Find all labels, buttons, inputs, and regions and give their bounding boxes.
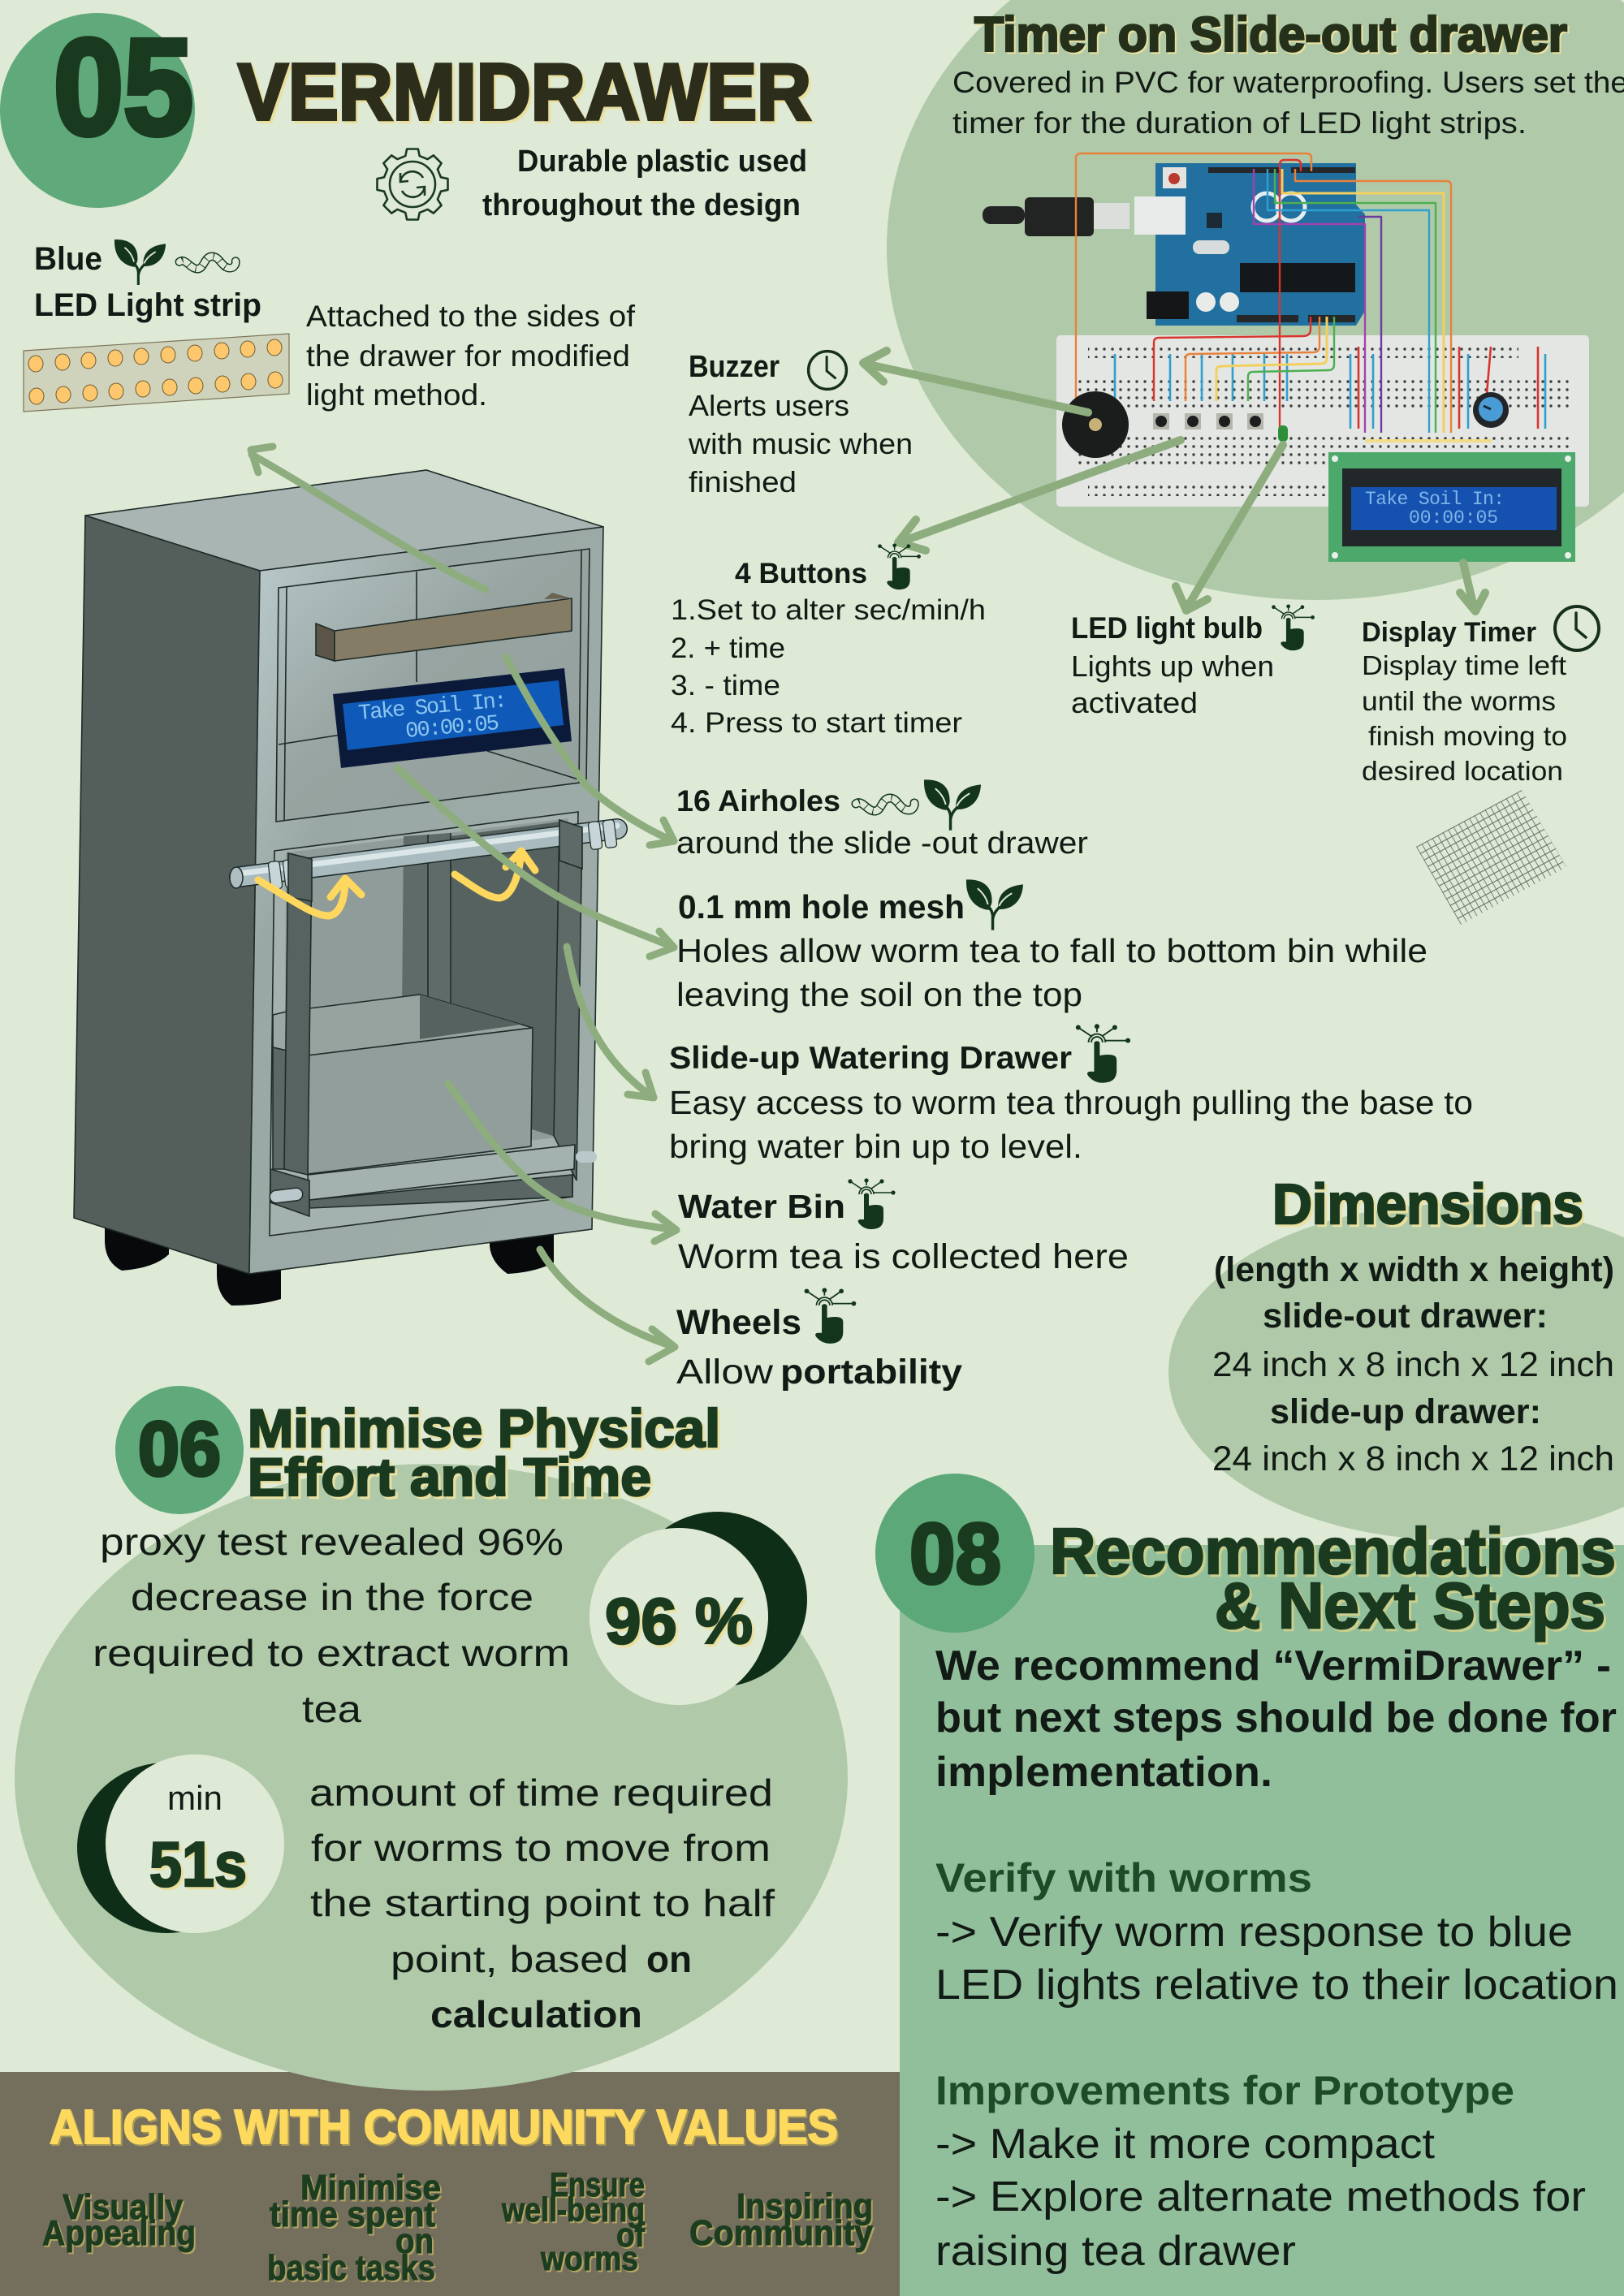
text: recommendation: We recommend “VermiDrawer” - (935, 1642, 1611, 1690)
heading: minimise physical effort and time: Effort and Time (248, 1447, 651, 1507)
value: minimise time: basic tasks (267, 2248, 435, 2288)
value: minimise time: time spent (270, 2195, 435, 2234)
icon: sprout (924, 779, 981, 831)
text: improvements for prototype (935, 2068, 1586, 2275)
title: VERMIDRAWER: VERMIDRAWER (238, 47, 811, 136)
text: buzzer: Buzzer (689, 350, 780, 384)
LED strip illustration (24, 334, 289, 412)
arrow: wheels (540, 1249, 675, 1362)
text: display timer: until the worms (1362, 686, 1556, 716)
text: time required: on (646, 1938, 692, 1980)
pull bar (230, 819, 617, 901)
heading: recommendations and next steps: & Next Steps (1215, 1569, 1605, 1642)
arrow: pull handle up yellow left (258, 878, 361, 916)
text: 4 buttons: 1.Set to alter sec/min/h (671, 594, 986, 626)
text: verify with worms: -> Verify worm response to blue (935, 1909, 1573, 1956)
panel: minimise effort ellipse (15, 1464, 848, 2091)
drawer LCD: 00:00:05 (404, 712, 500, 744)
value: inspiring community (689, 2186, 873, 2253)
text: dimensions: slide-up drawer: (1270, 1392, 1541, 1431)
text: timer description (952, 66, 1624, 140)
heading: dimensions: Dimensions (1272, 1172, 1583, 1236)
text: proxy test: required to extract worm (93, 1632, 570, 1674)
text: durable plastic: throughout the design (482, 188, 801, 222)
value: inspiring community: Community (689, 2213, 873, 2253)
icon: hand press (1076, 1024, 1130, 1083)
icon: hand press (848, 1178, 896, 1229)
arrow: buzzer (863, 351, 1088, 412)
icon: clock (1555, 606, 1599, 650)
text: dimensions: 24 inch x 8 inch x 12 inch (1212, 1345, 1614, 1384)
text: wheels: Wheels (676, 1303, 801, 1342)
text: mesh: Holes allow worm tea to fall to bottom bin while (676, 932, 1427, 969)
text: 16 airholes (676, 779, 1088, 861)
text: time required (309, 1772, 775, 2035)
illustration: vermidrawer cabinet (74, 470, 617, 1306)
value: minimise time: on (395, 2221, 434, 2261)
stat: 51 seconds: 51s (149, 1828, 247, 1900)
heading: blue LED light strip: Blue (34, 241, 102, 277)
text: LED light bulb (1071, 604, 1315, 719)
value: visually appealing (42, 2187, 196, 2253)
text: buzzer (688, 350, 913, 498)
section number 06 (115, 1386, 244, 1514)
heading: recommendations and next steps (1050, 1515, 1616, 1642)
icon: worm (179, 257, 235, 269)
Arduino board (983, 163, 1365, 326)
icon: wire mesh (1416, 790, 1566, 925)
text: 16 airholes: 16 Airholes (676, 784, 840, 818)
value: visually appealing: Appealing (42, 2213, 196, 2253)
panel: dimensions background ellipse (1168, 1204, 1624, 1540)
value: worm well-being: worms (540, 2239, 638, 2277)
text: durable plastic: Durable plastic used (517, 145, 807, 179)
text: 4 buttons: 4 Buttons (735, 558, 867, 589)
text: dimensions: 24 inch x 8 inch x 12 inch (1212, 1439, 1614, 1478)
LCD module (1328, 452, 1575, 562)
drawer LCD (333, 668, 572, 768)
icon: worm (856, 798, 914, 811)
value: worm well-being: Ensure (550, 2165, 645, 2203)
text: verify with worms: Verify with worms (935, 1855, 1312, 1901)
section number 06: 06 (138, 1406, 221, 1492)
heading: blue LED light strip: LED Light strip (34, 287, 261, 323)
text: dimensions (1212, 1250, 1614, 1478)
text: slide-up watering drawer (669, 1024, 1473, 1165)
breadboard circuit (983, 153, 1589, 562)
text: LED strip description: the drawer for modified (306, 339, 630, 373)
text: slide-up watering drawer: Easy access to worm tea through pulling the base to (669, 1084, 1473, 1121)
text: recommendation: implementation. (935, 1749, 1272, 1796)
icon: hand press (1272, 604, 1315, 650)
text: LED strip description: Attached to the sides of (306, 300, 636, 333)
potentiometer (1473, 392, 1509, 428)
stat: 96 percent (590, 1512, 807, 1705)
wheels (105, 1226, 554, 1306)
icon: sprout (114, 240, 166, 285)
text: recommendation: but next steps should be done for (935, 1694, 1617, 1741)
stat: 51 seconds: min (167, 1779, 222, 1817)
arrow: buttons (898, 440, 1181, 550)
LED (1278, 425, 1288, 442)
wires (1076, 153, 1451, 433)
text: verify with worms: LED lights relative to their location (935, 1962, 1618, 2009)
arrow: mesh (397, 768, 674, 956)
text: verify with worms (935, 1855, 1618, 2009)
heading: recommendations and next steps: Recommendations (1050, 1515, 1616, 1587)
text: water bin: Worm tea is collected here (678, 1237, 1129, 1276)
section number 08: 08 (909, 1506, 1001, 1602)
text: 16 airholes: around the slide -out drawer (676, 826, 1088, 861)
value: worm well-being: of (616, 2216, 646, 2254)
arrow: slide-up drawer (567, 947, 654, 1098)
push buttons (1153, 413, 1263, 429)
text: improvements for prototype: Improvements for Prototype (935, 2068, 1514, 2113)
text: dimensions: (length x width x height) (1214, 1250, 1614, 1289)
text: time required: amount of time required (309, 1772, 773, 1814)
text: time required: point, based (391, 1938, 628, 1980)
text: time required: calculation (430, 1993, 642, 2035)
panel: timer background ellipse (887, 0, 1624, 600)
heading: blue LED light strip (34, 240, 261, 323)
panel: recommendations (900, 1545, 1624, 2296)
value: minimise time (267, 2168, 441, 2288)
text: proxy test: proxy test revealed 96% (100, 1521, 564, 1563)
text: LED light bulb: Lights up when (1071, 650, 1274, 683)
drawer LCD: Take Soil In: (357, 689, 508, 727)
text: dimensions: slide-out drawer: (1263, 1297, 1548, 1336)
icon: hand press (878, 543, 921, 589)
text: 4 buttons: 4. Press to start timer (671, 707, 962, 739)
arrow: water bin (448, 1084, 676, 1241)
upper drawer (276, 549, 590, 822)
text: water bin: Water Bin (678, 1188, 845, 1225)
arrow: LED bulb (1176, 445, 1283, 611)
value: minimise time: Minimise (300, 2168, 441, 2208)
icon: sprout (966, 879, 1023, 930)
text: display timer: Display time left (1362, 650, 1566, 680)
text: display timer: finish moving to (1368, 721, 1567, 751)
value: inspiring community: Inspiring (736, 2186, 873, 2226)
text: time required: the starting point to half (310, 1882, 775, 1924)
section number 08 (875, 1474, 1034, 1633)
text: mesh: leaving the soil on the top (676, 976, 1082, 1013)
stat: 51 seconds (77, 1754, 284, 1933)
text: durable plastic (482, 145, 807, 222)
lower watering drawer (270, 812, 591, 1236)
text: LED strip description (306, 300, 636, 412)
text: 4 buttons: 3. - time (671, 670, 780, 701)
value: worm well-being (501, 2165, 646, 2277)
text: wheels: Allow (676, 1353, 774, 1392)
text: recommendation (935, 1642, 1617, 1796)
icon: hand press (805, 1288, 856, 1344)
water bin (308, 995, 533, 1174)
text: time required: for worms to move from (311, 1827, 771, 1869)
text: LED light bulb: LED light bulb (1071, 611, 1263, 645)
text: wheels (676, 1288, 962, 1392)
arrow: pull handle up yellow right (455, 851, 535, 898)
arrow: display timer (1460, 563, 1485, 611)
LCD module: Take Soil In: (1365, 489, 1505, 510)
text: improvements for prototype: raising tea drawer (935, 2228, 1296, 2275)
text: buzzer: with music when (688, 427, 913, 460)
text: timer description: Covered in PVC for waterproofing. Users set the (952, 66, 1624, 99)
text: 4 buttons (671, 543, 986, 739)
text: display timer: desired location (1362, 756, 1563, 786)
panel: community values band (0, 2072, 900, 2296)
text: LED strip description: light method. (306, 378, 487, 412)
text: buzzer: finished (689, 465, 797, 498)
heading: timer on slide-out drawer: Timer on Slide-out drawer (974, 7, 1567, 62)
buzzer (1062, 391, 1129, 458)
heading: minimise physical effort and time: Minimise Physical (248, 1398, 720, 1458)
text: improvements for prototype: -> Explore alternate methods for (935, 2173, 1586, 2220)
text: LED light bulb: activated (1071, 686, 1198, 719)
text: timer description: timer for the duration of LED light strips. (952, 106, 1527, 140)
text: 4 buttons: 2. + time (671, 632, 785, 664)
heading: minimise physical effort and time (248, 1398, 720, 1507)
text: mesh: 0.1 mm hole mesh (678, 888, 965, 926)
text: slide-up watering drawer: Slide-up Watering Drawer (669, 1041, 1072, 1076)
arrow: airholes (506, 657, 674, 845)
text: proxy test: tea (302, 1688, 361, 1730)
text: buzzer: Alerts users (689, 389, 849, 422)
text: proxy test (93, 1521, 570, 1730)
text: water bin (678, 1178, 1129, 1276)
LCD module: 00:00:05 (1409, 507, 1498, 529)
text: display timer: Display Timer (1362, 617, 1536, 648)
value: worm well-being: well-being (501, 2190, 645, 2229)
section number 05: 05 (54, 11, 193, 163)
text: mesh (676, 879, 1427, 1013)
icon: recycling gear (377, 149, 448, 219)
text: slide-up watering drawer: bring water bin up to level. (669, 1128, 1082, 1165)
text: display timer (1362, 606, 1599, 786)
drawer handle (316, 593, 572, 661)
heading: community values: ALIGNS WITH COMMUNITY VALUES (50, 2100, 838, 2154)
value: visually appealing: Visually (63, 2187, 183, 2227)
text: proxy test: decrease in the force (131, 1576, 533, 1618)
section number 05 (0, 11, 195, 208)
arrow: LED strip (251, 447, 486, 589)
text: improvements for prototype: -> Make it more compact (935, 2121, 1436, 2168)
icon: clock (809, 352, 846, 389)
stat: 96 percent: 96 % (605, 1585, 753, 1657)
text: wheels: portability (780, 1353, 962, 1392)
